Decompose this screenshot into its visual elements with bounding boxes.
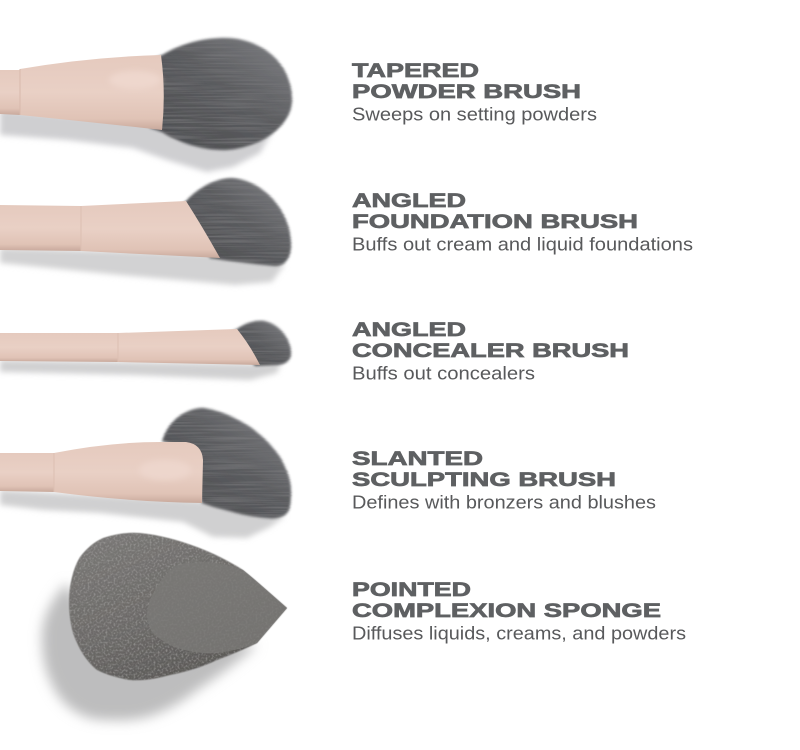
text block: pointed complexion sponge: POINTED	[352, 580, 471, 601]
icon: angled concealer brush	[0, 321, 291, 380]
text block: slanted sculpting brush: SLANTED	[352, 449, 483, 470]
text block: tapered powder brush: Sweeps on setting powders	[352, 104, 597, 124]
text block: slanted sculpting brush	[352, 449, 656, 512]
text block: pointed complexion sponge: Diffuses liquids, creams, and powders	[352, 624, 686, 644]
text block: angled concealer brush: ANGLED	[352, 320, 466, 341]
text block: angled concealer brush: CONCEALER BRUSH	[352, 341, 629, 362]
text block: angled foundation brush	[352, 191, 693, 254]
text block: slanted sculpting brush: SCULPTING BRUSH	[352, 470, 616, 491]
icon: tapered powder brush	[0, 38, 292, 172]
icon: angled foundation brush	[0, 178, 291, 285]
text block: tapered powder brush	[352, 61, 597, 124]
text block: tapered powder brush: POWDER BRUSH	[352, 82, 581, 103]
text block: angled foundation brush: ANGLED	[352, 191, 466, 212]
text block: angled concealer brush	[352, 320, 629, 384]
text block: tapered powder brush: TAPERED	[352, 61, 479, 82]
text block: pointed complexion sponge	[352, 580, 686, 644]
text block: pointed complexion sponge: COMPLEXION SPONGE	[352, 601, 661, 622]
text block: angled concealer brush: Buffs out concealers	[352, 364, 535, 384]
text block: angled foundation brush: FOUNDATION BRUSH	[352, 212, 638, 233]
text block: slanted sculpting brush: Defines with bronzers and blushes	[352, 492, 656, 512]
icon: slanted sculpting brush	[0, 408, 291, 538]
text block: angled foundation brush: Buffs out cream and liquid foundations	[352, 234, 693, 254]
icon: pointed complexion sponge	[42, 533, 287, 720]
